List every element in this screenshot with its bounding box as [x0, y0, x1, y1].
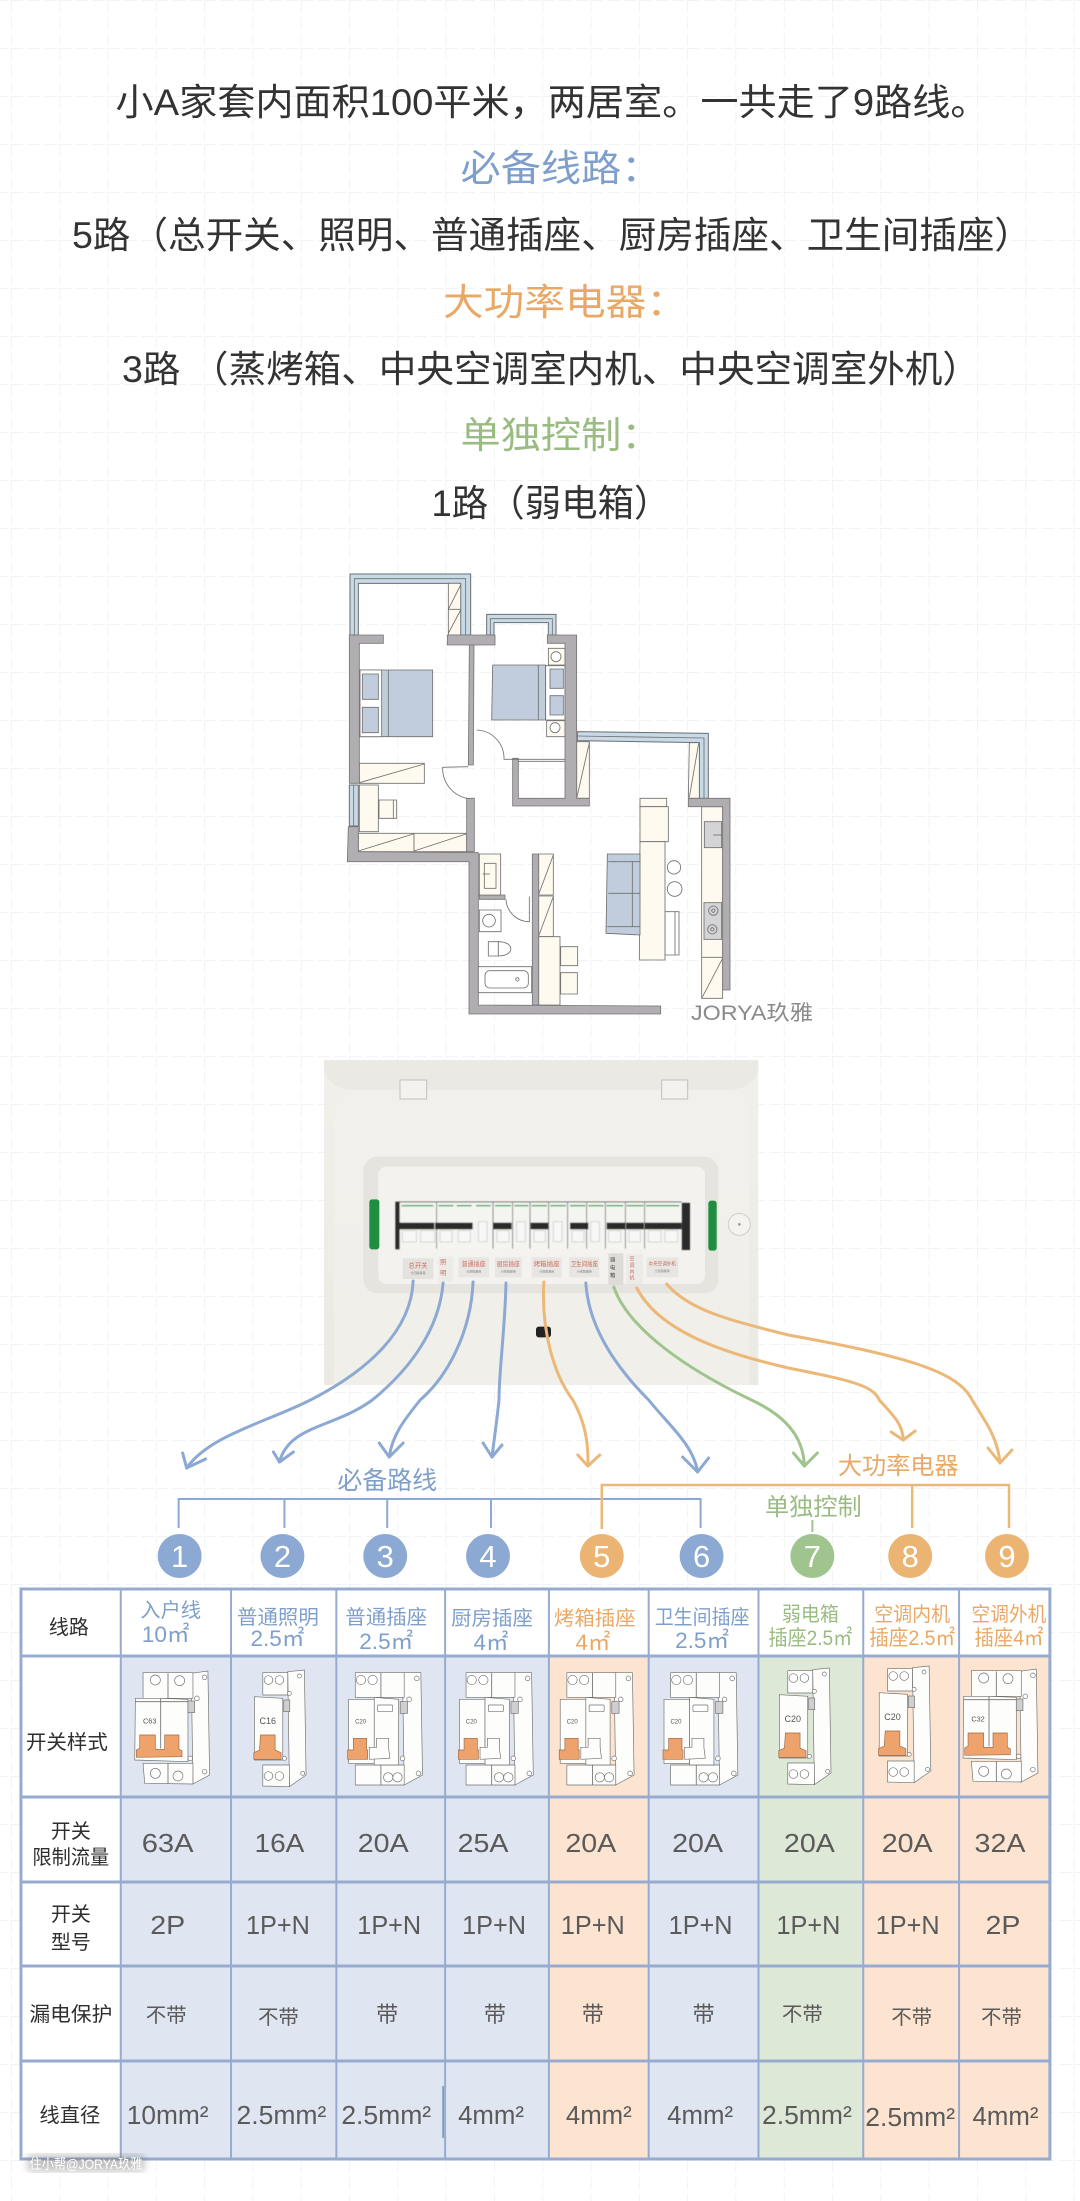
breaker labels: 分回路漏保: [501, 1269, 516, 1274]
kitchen counter: [702, 807, 723, 998]
row: leakage protection: 带: [484, 2002, 506, 2027]
row: wire diameter: 4mm²: [973, 2101, 1039, 2131]
bracket: essential circuits: 必备路线: [337, 1467, 437, 1495]
sofa: [606, 854, 640, 935]
breaker 7: [779, 1668, 831, 1785]
breaker 8: [879, 1666, 931, 1783]
breaker labels: 分回路漏保: [466, 1269, 481, 1274]
row: breaker type: 1P+N: [669, 1910, 733, 1940]
row: breaker type: 1P+N: [776, 1910, 840, 1940]
breaker labels: 箱: [610, 1271, 616, 1279]
row: circuit names: 厨房插座: [451, 1607, 533, 1630]
row: circuit names: 2.5㎡: [250, 1626, 304, 1651]
row: current limit: 限制流量: [32, 1846, 109, 1869]
arrow 3: [379, 1282, 473, 1457]
subheading: separate control: 单独控制：: [460, 415, 662, 456]
row: breaker type: 型号: [51, 1931, 91, 1954]
green clips: [369, 1199, 379, 1249]
row: current limit: 20A: [358, 1828, 409, 1858]
breaker labels: 普通插座: [462, 1259, 486, 1268]
row: leakage protection: 不带: [891, 2006, 932, 2029]
row: breaker type: 1P+N: [357, 1910, 421, 1940]
circle 1: 1: [171, 1539, 188, 1574]
breaker 1: C63: [143, 1716, 156, 1725]
breaker labels: 空: [630, 1256, 635, 1263]
breaker labels: 厨房插座: [497, 1259, 520, 1268]
walls: [347, 635, 730, 1014]
row: wire diameter: 2.5mm²: [865, 2102, 955, 2132]
bed: second bedroom: [492, 648, 565, 737]
row: leakage protection: 不带: [981, 2006, 1022, 2029]
breaker 5: [559, 1673, 634, 1785]
bed: master bedroom: [360, 670, 433, 737]
subheading: essential circuits: 必备线路：: [460, 148, 662, 189]
circle 4: 4: [479, 1539, 497, 1574]
screw: [728, 1213, 750, 1235]
row: breaker styles: [26, 1666, 1038, 1787]
breaker labels: 内: [630, 1268, 635, 1275]
row: breaker type: 1P+N: [876, 1910, 940, 1940]
row: breaker type: 开关: [51, 1903, 91, 1926]
bathroom fixtures: [478, 854, 532, 993]
box body: [324, 1060, 758, 1385]
row: leakage protection: 不带: [782, 2003, 823, 2026]
breaker labels: 烤箱插座: [534, 1259, 560, 1268]
row: current limit: 20A: [784, 1828, 836, 1858]
row: circuit names: 空调外机: [972, 1603, 1046, 1626]
breaker 3: C20: [355, 1719, 367, 1725]
arrow 1: [183, 1281, 413, 1468]
table grid: [21, 1589, 1050, 2159]
row: wire diameter: 4mm²: [458, 2100, 524, 2130]
circle 3: 3: [377, 1539, 394, 1574]
text: essential circuits list: 5路（总开关、照明、普通插座、厨房插座、卫生间插座）: [72, 215, 1032, 256]
row: circuit names: 10㎡: [142, 1622, 190, 1647]
row: circuit names: 卫生间插座: [655, 1606, 750, 1629]
box latch: [536, 1327, 551, 1337]
row: circuit names: 入户线: [140, 1599, 201, 1622]
circle 9: 9: [998, 1539, 1016, 1574]
circle 7: [790, 1534, 834, 1578]
breaker labels: 电: [610, 1263, 616, 1271]
breaker labels: 总开关: [409, 1260, 428, 1269]
row: current limit: 32A: [975, 1828, 1026, 1858]
row: wire diameter: [39, 2100, 1039, 2132]
row: wire diameter: 4mm²: [667, 2100, 733, 2130]
box lid edge: [324, 1060, 758, 1090]
row: circuit names: 弱电箱: [782, 1603, 839, 1626]
row: breaker type: 1P+N: [561, 1910, 625, 1940]
row: circuit names: 插座4㎡: [975, 1626, 1043, 1650]
row: wire diameter: 4mm²: [566, 2100, 632, 2130]
row: leakage protection: [29, 2002, 1022, 2029]
photo: distribution box: [324, 1060, 758, 1385]
row: circuit names: 2.5㎡: [359, 1629, 413, 1654]
breaker labels: 中央空调外机: [649, 1260, 676, 1267]
breaker labels: 分回路漏保: [655, 1268, 670, 1273]
circle 5: 5: [593, 1539, 610, 1574]
intro text block: [72, 82, 1032, 524]
row: circuit names: 烤箱插座: [554, 1607, 636, 1630]
heading: total circuits: 小A家套内面积100平米，两居室。一共走了9路线。: [116, 82, 989, 123]
circle 9: [985, 1534, 1029, 1578]
lid clips: [400, 1080, 688, 1099]
breaker 8: C20: [884, 1712, 901, 1722]
bracket: essential circuits: [179, 1467, 701, 1528]
row: circuit names: 空调内机: [874, 1603, 950, 1626]
circle 2: 2: [274, 1539, 291, 1574]
row: circuit names: 2.5㎡: [675, 1628, 729, 1653]
breaker labels: 调: [630, 1262, 635, 1269]
row: leakage protection: 不带: [146, 2004, 187, 2027]
row: current limit: 16A: [254, 1828, 305, 1858]
breaker labels: 分回路漏保: [411, 1270, 425, 1275]
table fills: [21, 1589, 1050, 2159]
circle 3: [363, 1534, 407, 1578]
breaker 3: [348, 1673, 422, 1785]
breaker 9: [963, 1669, 1038, 1782]
breaker 4: [458, 1673, 533, 1785]
arrow 2: [273, 1283, 443, 1462]
breaker labels: 明: [440, 1269, 446, 1277]
row: current limit: [32, 1820, 1026, 1869]
numbered circles: [158, 1534, 1029, 1578]
breaker 7: C20: [785, 1714, 801, 1724]
row: circuit names: 普通照明: [237, 1606, 319, 1629]
text: high power list: 3路 （蒸烤箱、中央空调室内机、中央空调室外机）: [122, 349, 980, 390]
breaker 9: C32: [971, 1714, 985, 1723]
breaker window: [363, 1157, 718, 1293]
breaker labels: 弱: [610, 1257, 615, 1264]
row: circuit names: 线路: [49, 1616, 89, 1639]
breaker 1: [135, 1671, 210, 1784]
row: wire diameter: 线直径: [39, 2104, 100, 2127]
arrow 5: [543, 1282, 600, 1466]
row: breaker type: 1P+N: [246, 1910, 310, 1940]
row: wire diameter: 10mm²: [127, 2100, 209, 2130]
circle 2: [260, 1534, 304, 1578]
circle 8: 8: [902, 1539, 919, 1574]
watermark: JORYA: JORYA玖雅: [691, 1002, 813, 1025]
arrow 6: [586, 1283, 709, 1472]
breaker labels: 照: [440, 1258, 447, 1266]
row: current limit: 20A: [672, 1828, 724, 1858]
arrow 7: [614, 1287, 817, 1466]
text: separate control list: 1路（弱电箱）: [432, 483, 670, 524]
row: current limit: 20A: [882, 1828, 933, 1858]
row: leakage protection: 带: [376, 2002, 398, 2027]
breaker 2: [254, 1670, 306, 1787]
subheading: high power appliances: 大功率电器：: [443, 282, 687, 323]
doors: [443, 730, 565, 922]
bracket: high power: 大功率电器: [838, 1453, 959, 1480]
row: current limit: 25A: [458, 1828, 509, 1858]
row: breaker type: 2P: [150, 1910, 185, 1940]
breaker 6: C20: [670, 1719, 682, 1725]
row: wire diameter: 2.5mm²: [341, 2100, 431, 2130]
row: breaker type: 1P+N: [462, 1910, 526, 1940]
row: breaker styles: 开关样式: [26, 1731, 108, 1754]
row: circuit names: 4㎡: [575, 1630, 610, 1655]
circle 1: [158, 1534, 202, 1578]
arrow 8: [637, 1288, 915, 1440]
row: circuit names: 普通插座: [345, 1606, 427, 1629]
breaker row: [395, 1202, 690, 1250]
bracket: high power: [602, 1453, 1009, 1529]
row: leakage protection: 带: [582, 2002, 604, 2027]
row: current limit: 开关: [51, 1820, 91, 1843]
breaker labels: 分回路漏保: [539, 1269, 554, 1274]
breaker labels: [403, 1253, 678, 1285]
breaker labels: 机: [630, 1275, 635, 1282]
row: circuit names: 插座2.5㎡: [768, 1626, 852, 1650]
breaker labels: 分回路漏保: [577, 1269, 592, 1274]
row: circuit names: 4㎡: [474, 1630, 509, 1655]
row: current limit: 20A: [565, 1828, 617, 1858]
row: leakage protection: 不带: [258, 2006, 299, 2029]
row: leakage protection: 漏电保护: [29, 2003, 112, 2026]
row: wire diameter: 2.5mm²: [237, 2100, 327, 2130]
windows: [349, 574, 708, 826]
circle 6: [680, 1534, 724, 1578]
watermark: source credit: 住小帮@JORYA玖雅: [30, 2156, 142, 2172]
row: breaker type: 2P: [986, 1910, 1020, 1940]
row: current limit: 63A: [142, 1828, 194, 1858]
breaker 6: [663, 1673, 738, 1785]
breaker labels: 卫生间插座: [571, 1259, 599, 1268]
breaker 2: C16: [260, 1716, 276, 1726]
bracket: separate control: 单独控制: [765, 1494, 862, 1521]
circle 5: [580, 1534, 624, 1578]
floor plan: [347, 574, 730, 1014]
breaker 5: C20: [567, 1719, 578, 1725]
arrow 4: [483, 1283, 506, 1457]
row: wire diameter: 2.5mm²: [762, 2100, 852, 2130]
breaker 4: C20: [466, 1719, 478, 1725]
row: circuit names: [49, 1599, 1046, 1655]
row: circuit names: 插座2.5㎡: [869, 1626, 955, 1650]
circle 7: 7: [804, 1539, 821, 1574]
cabinets and furniture: [358, 583, 699, 1005]
arrow 9: [667, 1284, 1012, 1463]
circle 6: 6: [693, 1539, 710, 1574]
arrows from breakers to circuits: [183, 1281, 1012, 1472]
row: breaker type: [51, 1903, 1020, 1954]
circle 8: [888, 1534, 932, 1578]
circle 4: [466, 1534, 510, 1578]
table: circuit specifications: [21, 1589, 1050, 2159]
row: leakage protection: 带: [693, 2002, 715, 2027]
